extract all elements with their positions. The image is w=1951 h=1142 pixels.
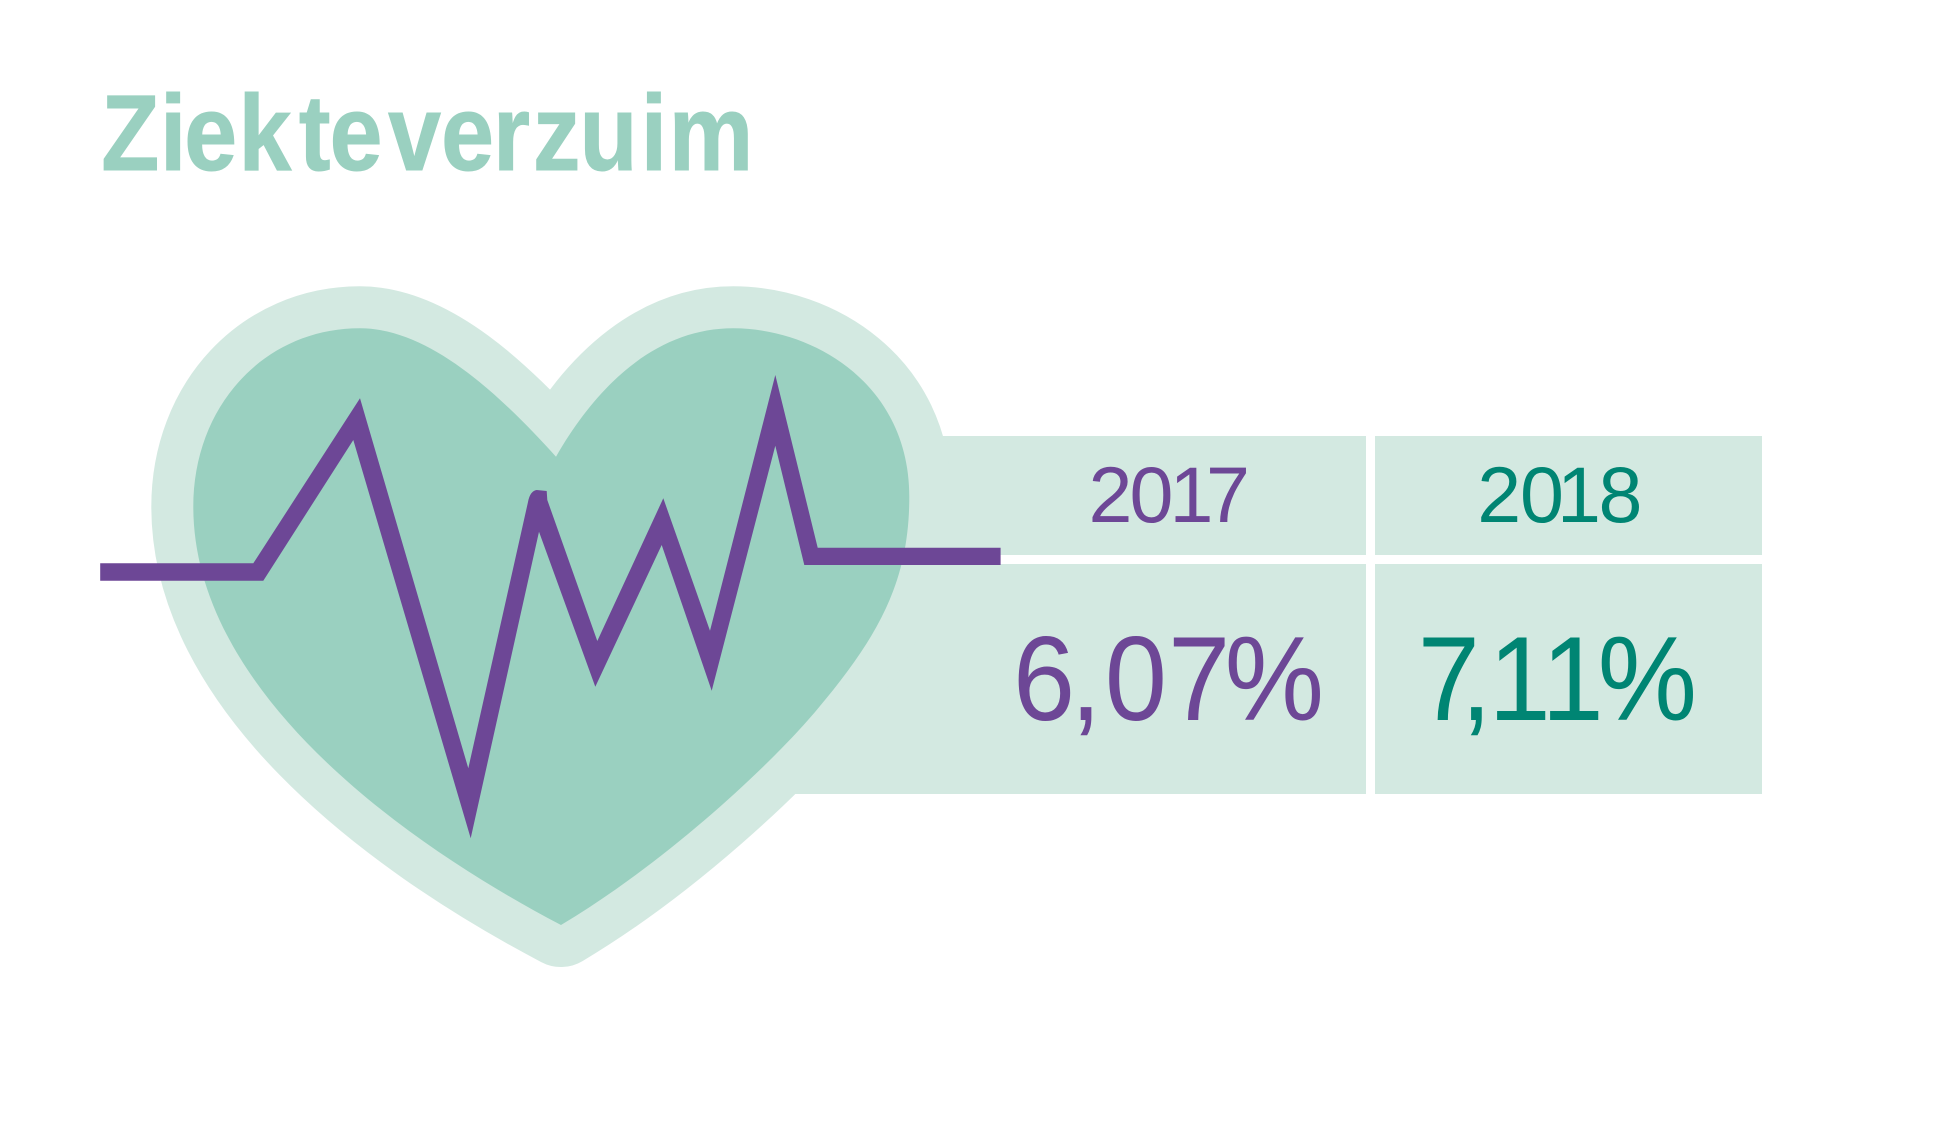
value: 7,11%: 7,11% [1418, 611, 1697, 746]
cell: 2018 header [1375, 436, 1762, 555]
title: Ziekteverzuim [101, 72, 753, 193]
cell: 2018 value [1375, 564, 1762, 794]
value: 6,07%: 6,07% [1013, 611, 1324, 746]
label: 2017: 2017 [1088, 450, 1250, 539]
icon: heart [193, 328, 909, 925]
panel: table of values [770, 436, 1762, 794]
cell: 2017 header [900, 436, 1366, 555]
heartbeat line [100, 375, 1001, 838]
label: 2018: 2018 [1477, 450, 1642, 539]
cell: 2017 value [770, 564, 1366, 794]
